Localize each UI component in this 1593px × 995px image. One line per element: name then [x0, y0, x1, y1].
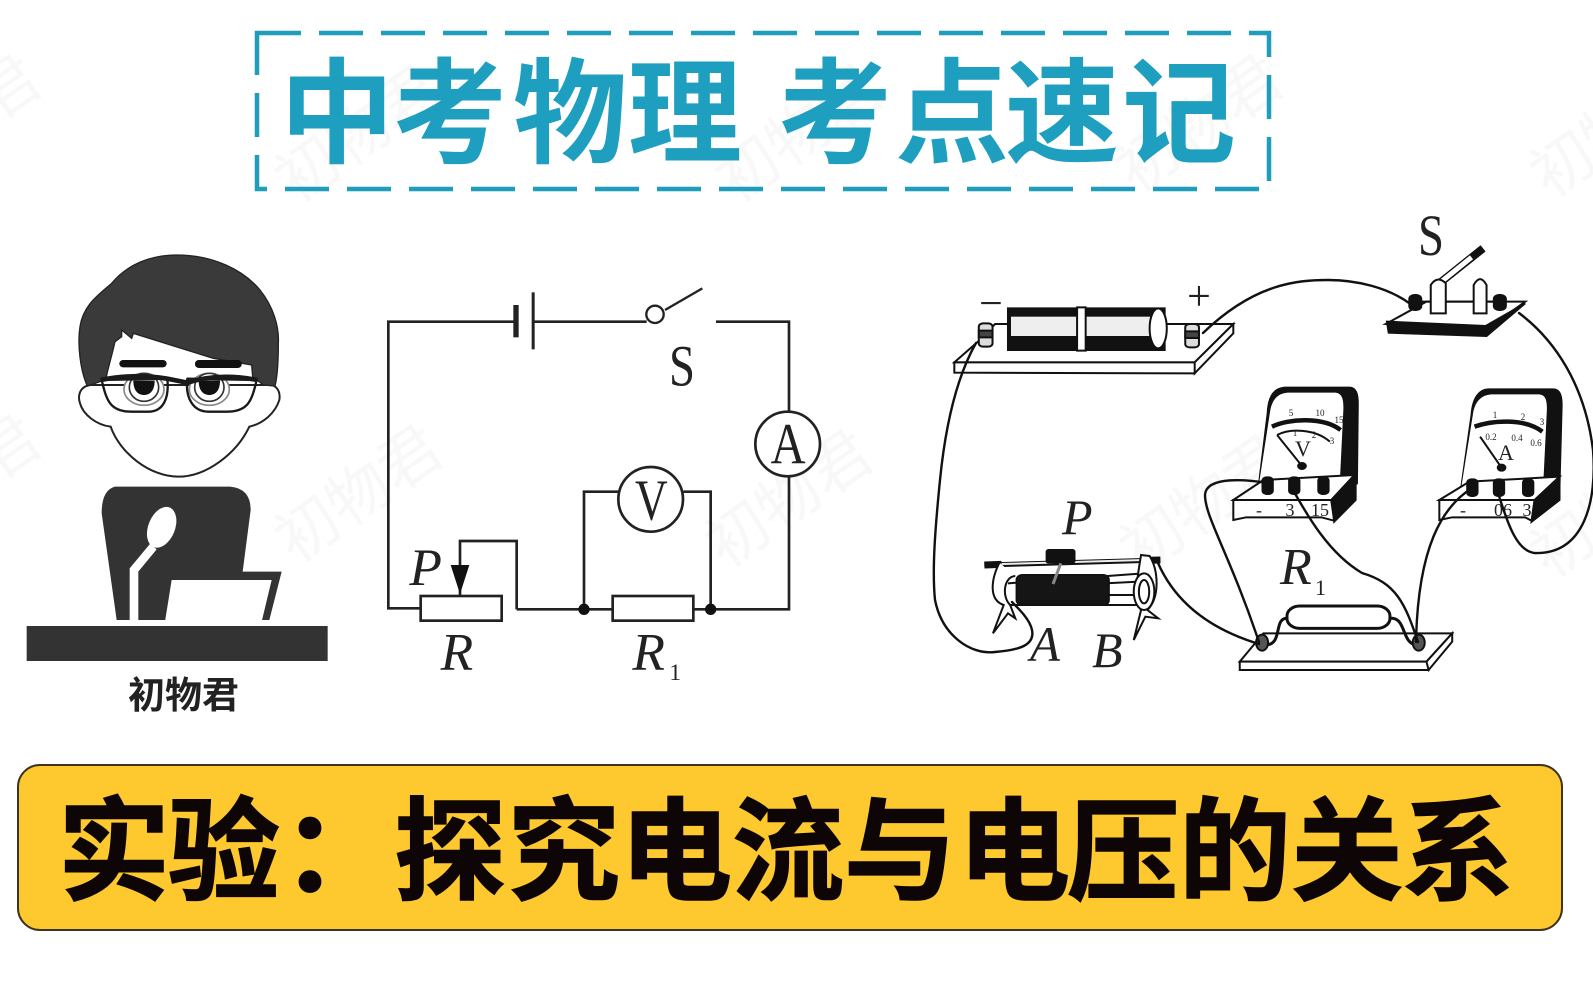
resistor R1	[613, 596, 693, 686]
physical circuit	[934, 203, 1593, 678]
banner background	[18, 765, 1562, 930]
junction dots	[578, 604, 716, 615]
watermark pattern: 初物君	[703, 53, 895, 216]
watermark pattern: 初物君	[1108, 423, 1300, 586]
voltmeter: V	[635, 467, 668, 532]
ammeter device: 2	[1521, 412, 1525, 422]
rheostat device: A	[1027, 616, 1060, 672]
paper	[165, 580, 272, 622]
ammeter device: -	[1460, 500, 1466, 520]
hair	[79, 255, 278, 386]
voltmeter device: 15	[1334, 415, 1344, 425]
banner text: 实验：探究电流与电压的关系	[58, 790, 1514, 915]
voltmeter device: 2	[1312, 430, 1316, 440]
switch label: S	[669, 333, 695, 398]
microphone	[134, 503, 182, 622]
bottom banner	[18, 765, 1562, 930]
resistor R1: 1	[669, 660, 681, 686]
presenter avatar	[27, 255, 328, 661]
ammeter device: 06	[1494, 500, 1512, 520]
desk	[27, 626, 328, 661]
glasses	[101, 376, 257, 412]
ammeter: A	[771, 411, 806, 476]
voltmeter device: 5	[1289, 408, 1294, 418]
ammeter device: 3	[1540, 417, 1545, 427]
knife switch: S	[1418, 203, 1444, 268]
resistor R1: R	[631, 621, 665, 681]
battery symbol	[513, 292, 535, 349]
ammeter device: A	[1498, 440, 1514, 465]
ammeter device: 0.6	[1530, 438, 1542, 448]
rheostat device	[984, 489, 1160, 678]
voltmeter device: 1	[1293, 428, 1297, 438]
voltmeter device: -	[1256, 500, 1262, 520]
ammeter device: 0.4	[1511, 433, 1523, 443]
switch symbol	[646, 288, 702, 323]
connecting wires	[934, 280, 1593, 652]
voltmeter device: 15	[1311, 500, 1329, 520]
title dashed frame	[257, 33, 1269, 189]
rheostat R: P	[408, 537, 442, 597]
resistor device R1: 1	[1315, 575, 1326, 600]
battery holder: +	[1187, 274, 1211, 320]
title box	[257, 33, 1269, 189]
watermark pattern: 初物君	[1103, 43, 1295, 206]
ammeter device: 0.2	[1485, 432, 1497, 442]
watermark pattern	[0, 43, 1593, 591]
voltmeter device: 3	[1330, 436, 1335, 446]
wires	[388, 322, 789, 609]
ammeter device	[1439, 389, 1562, 522]
ears and face	[79, 385, 280, 477]
circuit diagram	[388, 288, 820, 686]
ammeter device: 3	[1522, 500, 1532, 520]
voltmeter device	[1233, 388, 1358, 522]
torso	[102, 487, 282, 620]
ammeter device: 1	[1493, 410, 1497, 420]
rheostat device: B	[1092, 622, 1123, 678]
presenter name: 初物君	[128, 675, 239, 716]
knife switch	[1386, 203, 1525, 336]
eyes	[124, 373, 229, 405]
title text: 中考物理考点速记	[280, 52, 1236, 179]
voltmeter device: V	[1295, 436, 1311, 461]
resistor device R1: R	[1279, 539, 1312, 596]
battery holder: −	[979, 281, 1003, 327]
rheostat device: P	[1061, 489, 1093, 545]
rheostat R	[408, 537, 502, 681]
voltmeter device: 10	[1316, 408, 1325, 418]
battery holder	[954, 274, 1233, 373]
resistor device R1	[1240, 539, 1452, 670]
watermark pattern: 初物君	[263, 413, 455, 576]
watermark pattern: 初物君	[263, 53, 455, 216]
rheostat R: R	[440, 621, 473, 681]
voltmeter device: 3	[1286, 500, 1294, 520]
eyebrows	[119, 360, 167, 367]
watermark pattern: 初物君	[693, 418, 885, 581]
ammeter	[755, 411, 820, 476]
voltmeter	[618, 467, 683, 532]
